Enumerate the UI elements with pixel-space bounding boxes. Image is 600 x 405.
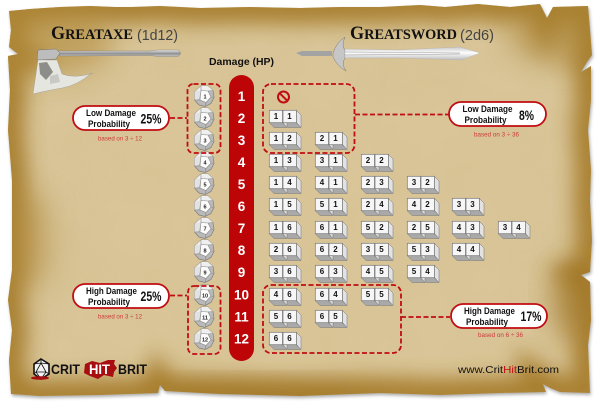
2d6 dice pairs: 1 bbox=[333, 178, 338, 187]
2d6 dice pairs: 2 bbox=[320, 134, 325, 143]
logo: Crit Hit Brit: BRIT bbox=[118, 361, 147, 377]
callout: greataxe high damage: based on 3 ÷ 12 bbox=[98, 314, 142, 320]
icon: greatsword bbox=[296, 37, 480, 71]
damage scale bar: 10 bbox=[234, 288, 249, 302]
2d6 dice pairs: 3 bbox=[470, 200, 475, 209]
2d6 dice pairs: 2 bbox=[425, 178, 430, 187]
d12 dice column: 8 bbox=[203, 248, 207, 254]
2d6 dice pairs: 4 bbox=[366, 267, 371, 276]
2d6 dice pairs: 4 bbox=[425, 267, 430, 276]
2d6 dice pairs: 3 bbox=[457, 200, 462, 209]
2d6 dice pairs: 6 bbox=[287, 245, 292, 254]
2d6 dice pairs: 5 bbox=[425, 223, 430, 232]
2d6 dice pairs: 2 bbox=[425, 200, 430, 209]
2d6 dice pairs: 1 bbox=[274, 112, 279, 121]
2d6 dice pairs: 2 bbox=[366, 200, 371, 209]
2d6 dice pairs: 4 bbox=[287, 178, 292, 187]
2d6 dice pairs: 6 bbox=[320, 312, 325, 321]
callout: greatsword high damage: Probability bbox=[466, 317, 509, 328]
callout: greataxe low damage bbox=[73, 84, 220, 153]
2d6 dice pairs: 2 bbox=[366, 178, 371, 187]
callout: greataxe high damage: High Damage bbox=[86, 286, 137, 297]
d12 dice column: 6 bbox=[203, 204, 207, 210]
damage scale bar: 11 bbox=[234, 310, 249, 324]
2d6 dice pairs: 2 bbox=[274, 245, 279, 254]
2d6 dice pairs: 5 bbox=[412, 245, 417, 254]
2d6 dice pairs: 6 bbox=[320, 245, 325, 254]
callout: greatsword low damage: Low Damage bbox=[462, 104, 512, 115]
2d6 dice pairs: 6 bbox=[287, 312, 292, 321]
2d6 dice pairs: 1 bbox=[274, 200, 279, 209]
damage scale bar: 8 bbox=[238, 243, 246, 258]
2d6 dice pairs: 3 bbox=[470, 223, 475, 232]
2d6 dice pairs: 4 bbox=[379, 200, 384, 209]
2d6 dice pairs: 4 bbox=[457, 223, 462, 232]
2d6 dice pairs: 5 bbox=[412, 267, 417, 276]
icon: no result for damage 1 bbox=[278, 92, 289, 102]
2d6 dice pairs: 5 bbox=[333, 312, 338, 321]
2d6 dice pairs: 3 bbox=[333, 267, 338, 276]
title: Greataxe bbox=[51, 23, 178, 44]
damage scale bar: 5 bbox=[238, 177, 246, 192]
2d6 dice pairs: 4 bbox=[516, 223, 521, 232]
2d6 dice pairs: 4 bbox=[333, 290, 338, 299]
d12 dice column: 2 bbox=[203, 116, 207, 122]
d12 dice column: 4 bbox=[203, 160, 207, 166]
title: Greatsword: (2d6) bbox=[460, 28, 494, 44]
damage scale bar: 4 bbox=[238, 155, 246, 170]
d12 dice column: 5 bbox=[203, 182, 207, 188]
damage scale bar: 7 bbox=[238, 221, 245, 236]
2d6 dice pairs: 5 bbox=[379, 290, 384, 299]
d12 dice column: 1 bbox=[203, 94, 207, 100]
damage scale bar: 6 bbox=[238, 199, 246, 214]
callout: greatsword low damage: based on 3 ÷ 36 bbox=[474, 132, 519, 138]
damage scale bar: 1 bbox=[238, 89, 246, 104]
callout: greatsword low damage bbox=[263, 84, 546, 153]
2d6 dice pairs: 2 bbox=[379, 156, 384, 165]
2d6 dice pairs: 1 bbox=[274, 156, 279, 165]
2d6 dice pairs: 3 bbox=[274, 267, 279, 276]
2d6 dice pairs: 6 bbox=[287, 334, 292, 343]
2d6 dice pairs: 6 bbox=[320, 223, 325, 232]
2d6 dice pairs: 3 bbox=[379, 178, 384, 187]
d12 dice column: 7 bbox=[203, 226, 207, 232]
2d6 dice pairs: 4 bbox=[412, 200, 417, 209]
2d6 dice pairs: 4 bbox=[470, 245, 475, 254]
2d6 dice pairs: 1 bbox=[333, 156, 338, 165]
2d6 dice pairs: 5 bbox=[320, 200, 325, 209]
heading: Damage (HP): Damage (HP) bbox=[209, 56, 274, 68]
2d6 dice pairs: 1 bbox=[274, 223, 279, 232]
2d6 dice pairs: 3 bbox=[320, 156, 325, 165]
callout: greataxe high damage: Probability bbox=[88, 297, 131, 308]
2d6 dice pairs: 1 bbox=[287, 112, 292, 121]
damage scale bar: 9 bbox=[238, 265, 245, 280]
2d6 dice pairs: 1 bbox=[274, 178, 279, 187]
2d6 dice pairs: 1 bbox=[333, 134, 338, 143]
d12 dice column: 10 bbox=[202, 294, 208, 300]
2d6 dice pairs: 2 bbox=[366, 156, 371, 165]
2d6 dice pairs: 3 bbox=[425, 245, 430, 254]
2d6 dice pairs: 3 bbox=[366, 245, 371, 254]
2d6 dice pairs: 4 bbox=[274, 290, 279, 299]
2d6 dice pairs: 5 bbox=[366, 290, 371, 299]
2d6 dice pairs: 1 bbox=[333, 200, 338, 209]
callout: greatsword low damage: 8% bbox=[519, 108, 534, 123]
callout: greatsword high damage: based on 6 ÷ 36 bbox=[478, 332, 523, 339]
d12 dice column: 12 bbox=[202, 338, 208, 344]
callout: greatsword high damage: 17% bbox=[520, 309, 542, 324]
2d6 dice pairs: 3 bbox=[287, 156, 292, 165]
2d6 dice pairs: 5 bbox=[287, 200, 292, 209]
damage scale bar: 12 bbox=[234, 332, 249, 346]
callout: greataxe low damage: Probability bbox=[88, 119, 131, 130]
callout: greataxe high damage: 25% bbox=[140, 289, 162, 304]
d12 dice column: 11 bbox=[202, 316, 208, 322]
logo: Crit Hit Brit: HIT bbox=[89, 361, 110, 377]
2d6 dice pairs: 3 bbox=[412, 178, 417, 187]
damage scale bar bbox=[229, 75, 254, 361]
callout: greatsword low damage: Probability bbox=[464, 115, 507, 126]
title: Greataxe: (1d12) bbox=[137, 28, 178, 44]
callout: greatsword high damage bbox=[263, 285, 547, 353]
callout: greataxe low damage: Low Damage bbox=[86, 108, 136, 119]
2d6 dice pairs: 6 bbox=[287, 267, 292, 276]
d12 dice column: 9 bbox=[203, 270, 207, 276]
2d6 dice pairs: 6 bbox=[320, 290, 325, 299]
callout: greataxe low damage: based on 3 ÷ 12 bbox=[98, 136, 142, 142]
2d6 dice pairs: 5 bbox=[366, 223, 371, 232]
title: Greatsword: GREATSWORD bbox=[350, 23, 457, 44]
2d6 dice pairs: 4 bbox=[457, 245, 462, 254]
website url: www.Crit HitBrit.com bbox=[457, 364, 559, 376]
2d6 dice pairs bbox=[269, 110, 530, 350]
2d6 dice pairs: 5 bbox=[379, 267, 384, 276]
d12 dice column bbox=[194, 86, 214, 350]
title: Greataxe: GREATAXE bbox=[51, 23, 133, 44]
2d6 dice pairs: 2 bbox=[287, 134, 292, 143]
2d6 dice pairs: 2 bbox=[333, 245, 338, 254]
d12 dice column: 3 bbox=[203, 138, 207, 144]
2d6 dice pairs: 5 bbox=[379, 245, 384, 254]
2d6 dice pairs: 2 bbox=[412, 223, 417, 232]
callout: greataxe high damage bbox=[73, 284, 220, 354]
2d6 dice pairs: 4 bbox=[320, 178, 325, 187]
2d6 dice pairs: 1 bbox=[333, 223, 338, 232]
2d6 dice pairs: 6 bbox=[287, 223, 292, 232]
damage scale bar: 2 bbox=[238, 111, 245, 126]
2d6 dice pairs: 6 bbox=[274, 334, 279, 343]
damage scale bar: 3 bbox=[238, 133, 246, 148]
2d6 dice pairs: 6 bbox=[320, 267, 325, 276]
2d6 dice pairs: 2 bbox=[379, 223, 384, 232]
2d6 dice pairs: 5 bbox=[274, 312, 279, 321]
icon: greataxe bbox=[33, 49, 180, 94]
2d6 dice pairs: 6 bbox=[287, 290, 292, 299]
callout: greataxe low damage: 25% bbox=[140, 112, 162, 126]
2d6 dice pairs: 1 bbox=[274, 134, 279, 143]
callout: greatsword high damage: High Damage bbox=[464, 306, 515, 317]
logo: Crit Hit Brit: CRIT bbox=[51, 361, 80, 377]
2d6 dice pairs: 3 bbox=[503, 223, 508, 232]
logo: Crit Hit Brit bbox=[31, 359, 147, 380]
